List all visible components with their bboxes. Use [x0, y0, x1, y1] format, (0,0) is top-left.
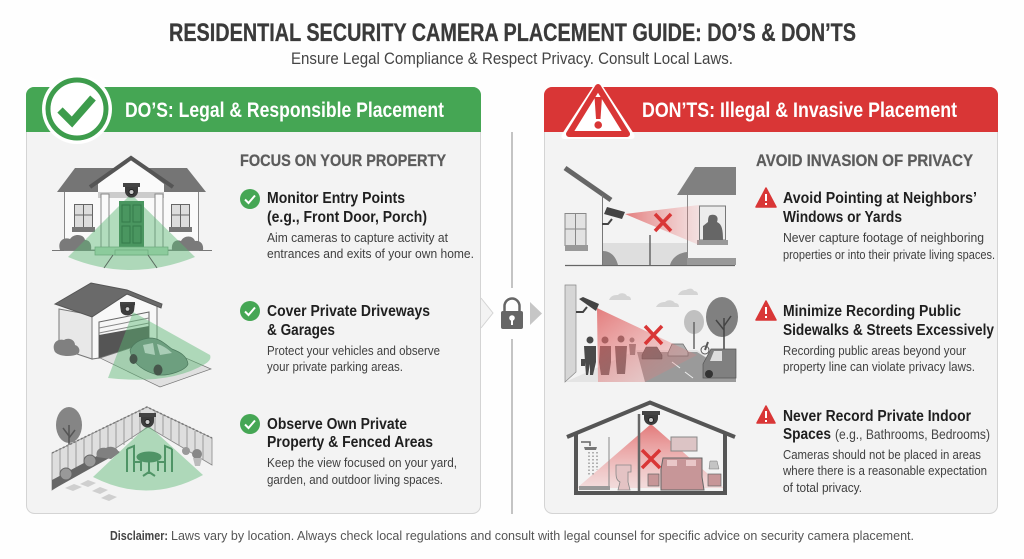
item body: entrances and exits of your own home.: [267, 247, 474, 261]
icon: check: [240, 414, 260, 434]
icon: padlock: [501, 299, 523, 329]
people: [581, 336, 636, 375]
beam: [108, 312, 210, 380]
item heading: [783, 190, 977, 226]
x mark: [655, 214, 671, 231]
icon: check: [240, 189, 260, 209]
x mark: [645, 326, 662, 344]
icon: warning: [757, 406, 775, 423]
item: neighbors: [756, 188, 995, 262]
item body: where there is a reasonable expectation: [782, 464, 987, 478]
item heading: [783, 408, 990, 443]
trees: [684, 310, 704, 334]
panel: don'ts: [544, 79, 998, 514]
item body: [783, 344, 975, 374]
section heading: focus on your property: FOCUS ON YOUR PROPERTY: [240, 151, 447, 170]
item body: Recording public areas beyond your: [783, 344, 966, 358]
item: public sidewalks: [756, 301, 994, 374]
beam: [93, 425, 203, 491]
item heading: [267, 190, 427, 226]
item body: Protect your vehicles and observe: [267, 344, 440, 358]
item heading: [267, 416, 433, 451]
patio furniture: [127, 446, 172, 476]
don'ts header text: DON’TS: Illegal & Invasive Placement: [642, 99, 957, 122]
item body: your private parking areas.: [267, 360, 403, 374]
illustration: garage with car: [54, 283, 211, 387]
item heading: Observe Own Private: [267, 416, 407, 433]
item: fenced areas: [240, 414, 457, 487]
item body: Cameras should not be placed in areas: [783, 448, 981, 462]
item heading: Property & Fenced Areas: [267, 434, 433, 451]
item body: [267, 456, 457, 487]
panel: do's: [26, 74, 481, 514]
cars: [642, 347, 662, 359]
illustration: indoor spaces: [567, 402, 735, 493]
item body: [267, 231, 474, 261]
icon: warning: [756, 188, 776, 207]
icon: check: [240, 301, 260, 321]
item body: property line can violate privacy laws.: [783, 360, 975, 374]
item heading: & Garages: [267, 322, 335, 339]
beam: [597, 308, 697, 382]
item body: Aim cameras to capture activity at: [267, 231, 448, 245]
icon: large check badge: [42, 74, 112, 144]
item body: Keep the view focused on your yard,: [267, 456, 457, 470]
camera: [604, 207, 625, 219]
item heading: Sidewalks & Streets Excessively: [783, 322, 994, 339]
illustration: fenced yard: [52, 407, 212, 501]
item heading: Windows or Yards: [783, 209, 902, 226]
car: [130, 338, 188, 375]
illustration: camera at neighbor window: [565, 167, 736, 266]
item heading: [783, 303, 994, 339]
do's header bar: [26, 87, 481, 132]
beam: [625, 205, 699, 245]
section heading: avoid invasion of privacy: AVOID INVASION OF PRIVACY: [756, 151, 974, 170]
do's header text: DO’S: Legal & Responsible Placement: [125, 99, 444, 122]
beam: [577, 424, 724, 488]
item heading: Cover Private Driveways: [267, 303, 430, 320]
item body: of total privacy.: [783, 481, 862, 495]
item heading: (e.g., Front Door, Porch): [267, 209, 427, 226]
x mark: [642, 450, 660, 468]
item heading: Avoid Pointing at Neighbors’: [783, 190, 977, 207]
disclaimer: Laws vary by location. Always check local regulations and consult with legal counsel for specific advice on security camera placement.: [171, 529, 914, 543]
item heading: Spaces: [783, 426, 831, 443]
illustration: public sidewalk: [565, 285, 738, 382]
item heading: Monitor Entry Points: [267, 190, 405, 207]
item heading: Minimize Recording Public: [783, 303, 961, 320]
item body: garden, and outdoor living spaces.: [267, 473, 443, 487]
item: monitor entry points: [240, 189, 474, 261]
don'ts header bar: [544, 87, 998, 132]
arrow: left chevron: [481, 298, 493, 328]
arrow: right triangle: [530, 302, 542, 325]
item body: properties or into their private living spaces.: [783, 248, 995, 262]
clouds: [609, 289, 698, 307]
title: RESIDENTIAL SECURITY CAMERA PLACEMENT GUIDE: DO’S & DON’TS: [169, 19, 856, 47]
illustration: house with camera: [52, 158, 212, 270]
subtitle: Ensure Legal Compliance & Respect Privacy. Consult Local Laws.: [291, 50, 733, 68]
item heading: [267, 303, 430, 339]
item body: [783, 231, 995, 262]
camera: [579, 297, 599, 311]
icon: warning: [756, 301, 776, 320]
item body: Never capture footage of neighboring: [783, 231, 984, 245]
item heading: (e.g., Bathrooms, Bedrooms): [835, 426, 990, 442]
item: driveways: [240, 301, 440, 374]
item heading: Never Record Private Indoor: [783, 408, 971, 425]
disclaimer: Disclaimer:: [110, 529, 168, 543]
item: indoor spaces: [757, 406, 990, 495]
item body: [267, 344, 440, 374]
icon: large warning triangle: [561, 79, 635, 139]
door and beam: [68, 194, 195, 270]
item body: [782, 448, 987, 495]
center divider with lock: [481, 132, 542, 514]
